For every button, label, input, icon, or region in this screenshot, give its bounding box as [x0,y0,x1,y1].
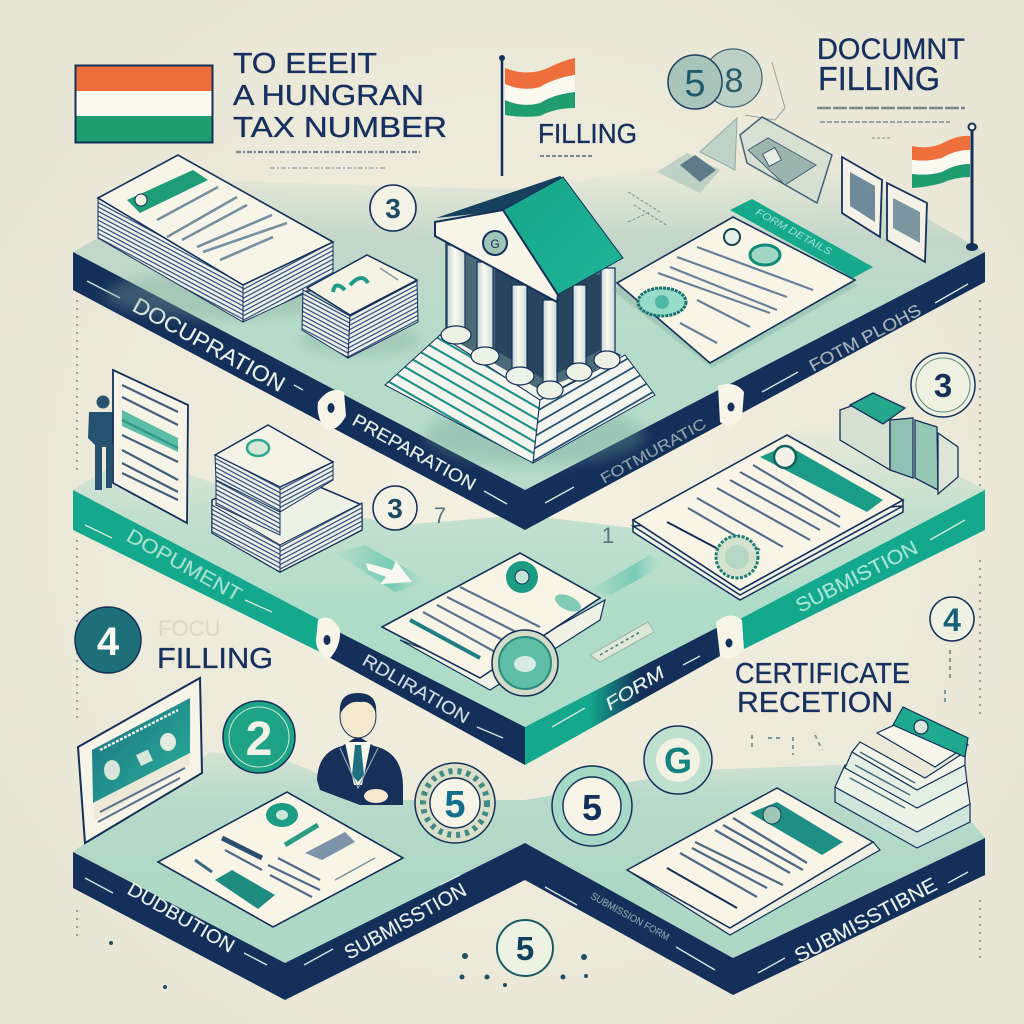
badge: 3 middle [373,486,417,530]
badge: overlapping 5 and 8: 5 [684,63,706,105]
icon: government building [385,176,655,465]
title: TAX NUMBER [233,112,447,144]
edge label: RDLIRATION: RDLIRATION [359,650,473,727]
small label tag [590,622,654,662]
badge: 5 center [552,766,632,846]
icon: book stack [835,707,970,848]
badge: overlapping 5 and 8: 8 [725,62,743,100]
heading: DOCUMNT FILLING [817,33,965,97]
badge: 4 right [930,597,974,641]
pediment [435,210,558,302]
tag number 1: 1 [602,523,614,548]
badge: 2 teal [223,701,295,773]
edge label: FOTMURATIC: FOTMURATIC [598,415,709,487]
badge: 4 right: 4 [943,602,961,638]
document: middle right stack [633,435,903,600]
badge: 3 right [911,353,975,417]
heading: FILLING lower: FILLING [157,643,273,675]
heading: CERTIFICATE RECETION: RECETION [737,687,893,719]
picture frames [842,157,927,262]
icon: government building: G [490,237,500,251]
document stack: middle [212,425,362,572]
edge label: DOCUPRATION: DOCUPRATION [129,293,289,397]
edge label: SUBMISTION: SUBMISTION [792,537,922,617]
panel: top platform [73,160,985,530]
document: form with teal header: FORM DETAILS [754,207,834,258]
heading: FILLING: FILLING [538,118,637,149]
badge: 5 decorative: 5 [444,784,466,826]
steps [425,405,645,465]
scattered dots [109,941,588,989]
bottom platform surface [73,752,985,963]
document stack: small [300,255,420,358]
badge: 5 bottom: 5 [516,930,534,967]
badge: 5 center: 5 [582,787,602,828]
tall document [113,370,188,523]
edge label: PREPARATION: PREPARATION [349,410,479,494]
arrow: left flow band [335,545,430,592]
badge: 2 teal: 2 [246,713,272,766]
binder clip right [716,615,744,658]
document: form with teal header [612,199,873,368]
edge label: FORM: FORM [602,662,668,714]
binder clip left [316,618,340,660]
flag: rectangular Hungarian flag [76,66,212,142]
person silhouette [88,396,117,490]
edge label: blurred text: SUBMISSION FORM [589,891,671,943]
edge dashes [85,872,968,973]
sheet header [127,170,208,213]
interior [445,240,612,390]
faded label: FOCU: FOCU [158,616,220,641]
icon: monitor [78,678,202,843]
dotted guide lines [77,300,980,960]
bottom platform edge [73,838,985,1000]
emblem [483,231,507,255]
badge: 5 decorative [415,763,495,843]
badge: 4 dark teal [75,607,141,673]
faded back-row documents [628,117,832,226]
badge: 3 top [370,185,416,231]
heading: CERTIFICATE RECETION: CERTIFICATE [735,658,910,690]
icon: businessman [317,693,403,805]
caption fragments near certificate [752,650,950,755]
flag: waving flag on pole [499,55,575,176]
edge label: DOPUMENT: DOPUMENT [123,525,245,606]
edge dashes [85,520,965,738]
middle edge right teal to navy [525,625,722,765]
sheet lines [157,187,287,260]
arrow: right flow band [590,555,665,595]
panel: middle platform [73,405,985,765]
title: A HUNGRAN [233,80,424,112]
caption under document filling [817,108,965,138]
caption under filling [540,155,592,157]
edge label: SUBMISSTION: SUBMISSTION [341,879,470,964]
badge: 3 middle: 3 [387,493,403,524]
binder clip right [718,384,744,425]
title small caption [236,152,420,168]
top platform surface [73,160,985,490]
person and document panel [88,370,188,523]
top platform edge [73,252,985,530]
title [233,48,447,144]
badge: 3 top: 3 [385,193,401,224]
badge: G [644,726,712,794]
roof [436,176,563,218]
badge: overlapping 5 and 8 [668,49,785,120]
icon: filing boxes [840,393,958,494]
edge dashes [87,281,968,504]
document: bottom right [627,788,880,935]
badge: G: G [664,740,692,781]
middle edge left teal [73,490,320,652]
middle edge left navy [325,625,525,765]
badge: 5 bottom [497,920,553,976]
middle edge right teal [738,490,985,652]
middle platform surface [73,405,985,727]
binder clip left [318,390,346,430]
heading: DOCUMNT FILLING: FILLING [818,60,940,97]
edge label: DUDBUTION: DUDBUTION [124,879,238,957]
heading: CERTIFICATE RECETION [735,658,910,719]
columns [441,245,620,399]
document stack: large [98,155,345,322]
badge: 4 dark teal: 4 [97,620,120,664]
heading: DOCUMNT FILLING: DOCUMNT [817,33,965,66]
edge label: FOTM PLOHS: FOTM PLOHS [806,301,924,376]
flag: right flag on pole [912,124,978,251]
seal medal [492,630,558,696]
document: bottom left collage [158,792,403,927]
document: center with seal [382,553,605,696]
tag number 7: 7 [434,503,446,528]
title: TO EEEIT [233,48,377,80]
badge: 3 right: 3 [934,367,952,404]
panel: bottom platform [73,752,985,1000]
edge label: SUBMISSTIBNE: SUBMISSTIBNE [791,874,941,967]
